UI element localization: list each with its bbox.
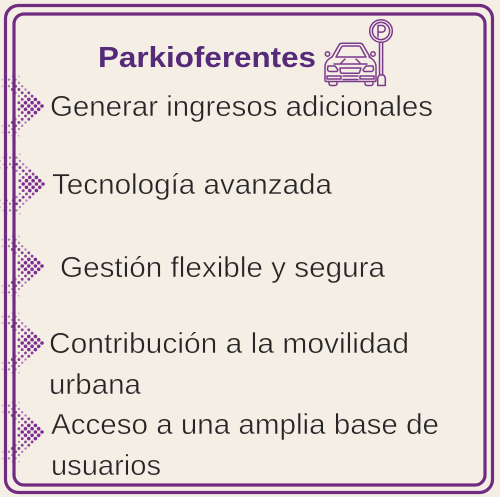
text: Contribución a la movilidad urbana: Contribución a la movilidad [49, 328, 409, 360]
icon: parking sign [370, 20, 392, 86]
text: Acceso a una amplia base de usuarios [51, 409, 439, 482]
bullet 2 dots [0, 154, 43, 214]
text: Acceso a una amplia base de usuarios: Acceso a una amplia base de [51, 409, 439, 441]
bullet 5 dots [0, 402, 42, 462]
bullet 3 dots [0, 236, 42, 296]
text: Acceso a una amplia base de usuarios: usuarios [51, 450, 161, 482]
text: Contribución a la movilidad urbana: urbana [49, 369, 142, 401]
bullet 4 dots [0, 313, 42, 373]
title: Parkioferentes [98, 42, 316, 74]
text: Tecnología avanzada: Tecnología avanzada [52, 169, 333, 201]
icon: car and parking sign [325, 20, 392, 86]
text: Gestión flexible y segura: Gestión flexible y segura [60, 252, 386, 284]
text: Generar ingresos adicionales: Generar ingresos adicionales [50, 91, 433, 123]
icon: car [325, 43, 376, 86]
bullet 1 dots [0, 76, 42, 136]
text: Contribución a la movilidad urbana [49, 328, 409, 401]
